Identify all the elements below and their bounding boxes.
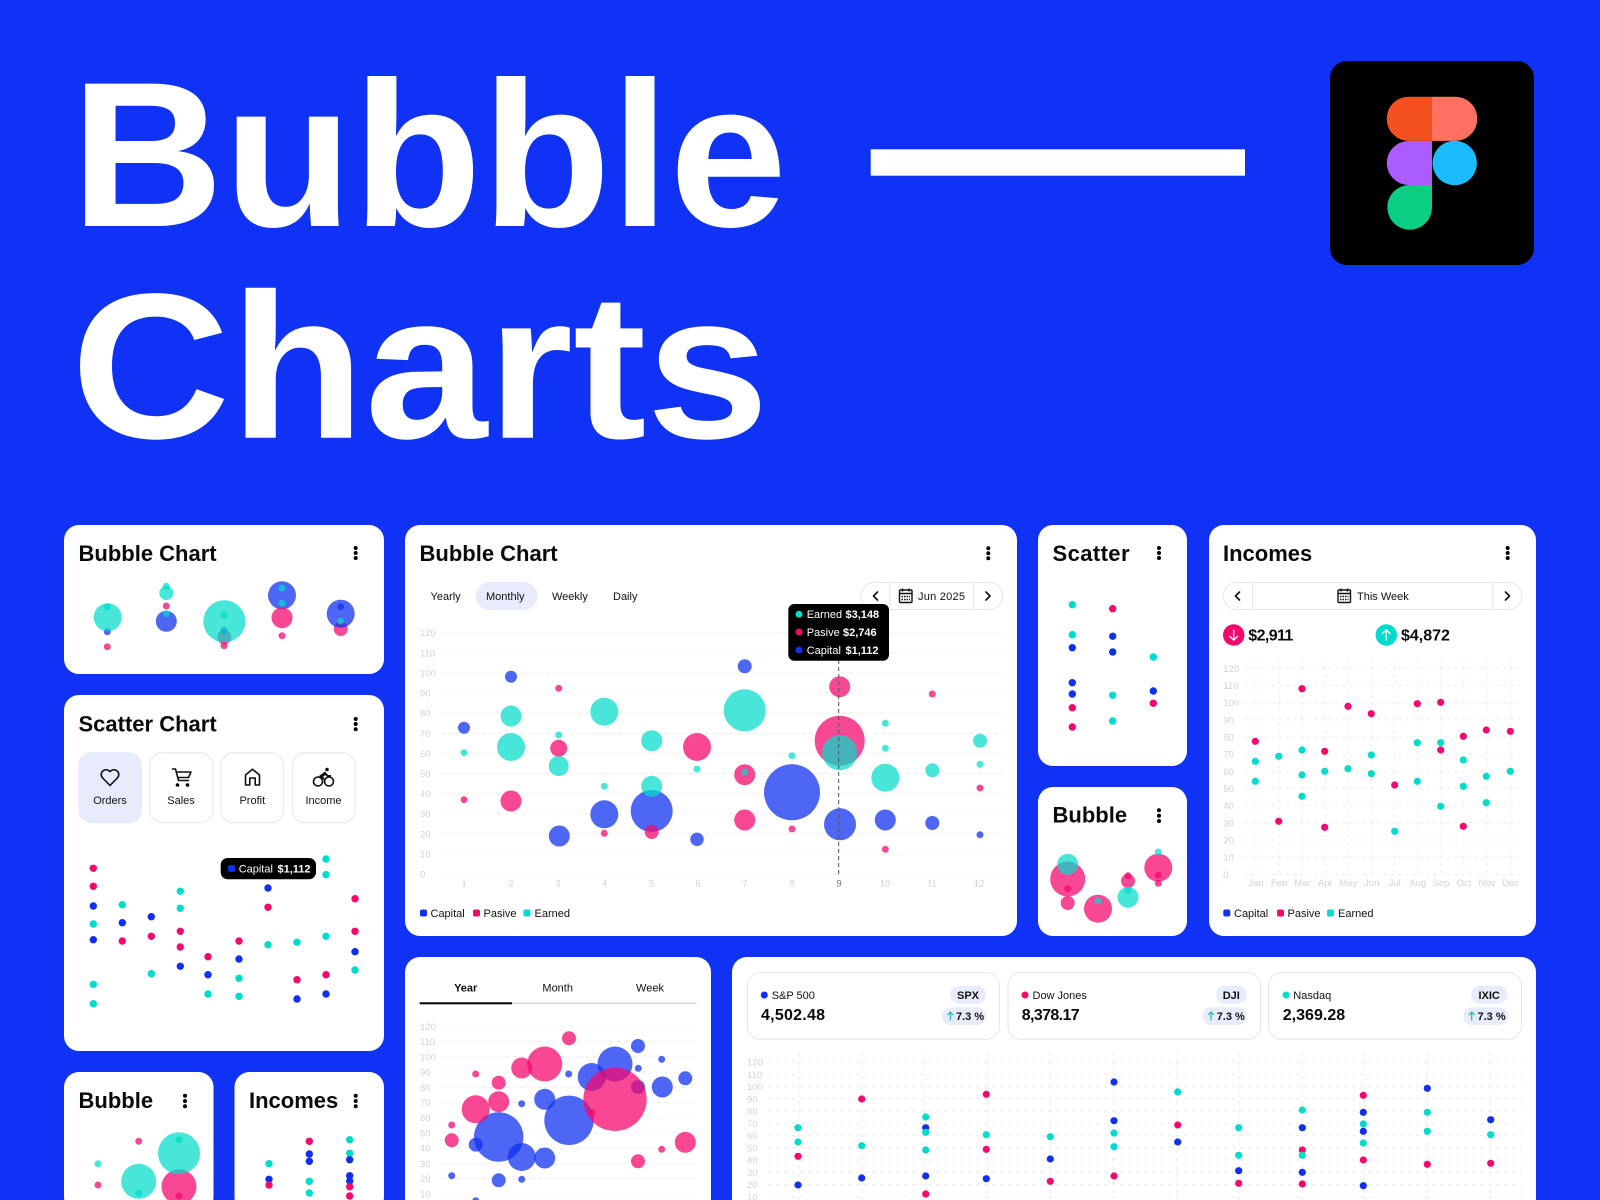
- x axis: 3: [555, 878, 561, 890]
- x axis: 8: [789, 878, 795, 890]
- stat card: Dow Jones: 8,378.17: [1022, 1007, 1080, 1024]
- tab: orders: [78, 752, 142, 823]
- date picker: [861, 582, 1002, 610]
- week picker: This Week: [1357, 591, 1409, 603]
- x axis: [461, 878, 984, 890]
- x axis: 5: [649, 878, 654, 890]
- tooltip: Pasive: [807, 627, 840, 639]
- grid: [441, 1026, 697, 1194]
- y axis: 110: [1223, 681, 1238, 692]
- stat card: S&P 500: 7.3 %: [956, 1011, 984, 1023]
- panel: incomes bottom left: [234, 1072, 384, 1200]
- y axis: 100: [420, 1052, 436, 1063]
- x axis: 2: [508, 878, 514, 890]
- tab: orders: Orders: [93, 795, 127, 807]
- x axis: 10: [880, 878, 890, 890]
- x axis: Aug: [1409, 878, 1426, 889]
- panel: bubble bottom left: [64, 1072, 214, 1200]
- stat: up: $4,872: [1401, 628, 1450, 645]
- y axis: 0: [1223, 870, 1229, 881]
- stat card: Nasdaq: Nasdaq: [1293, 990, 1331, 1002]
- tooltip: capital: [221, 858, 316, 879]
- y axis: 20: [1223, 836, 1234, 846]
- x axis: Oct: [1457, 878, 1472, 889]
- stat card: Nasdaq: [1268, 972, 1522, 1039]
- title: Charts: [71, 251, 769, 482]
- panel: scatter small: [1038, 525, 1187, 766]
- legend: Capital: [430, 908, 465, 920]
- bubbles: [458, 659, 987, 853]
- period tabs: Weekly: [552, 591, 588, 603]
- y axis: [1223, 664, 1239, 881]
- tab: sales: [150, 753, 213, 823]
- tabs: Year: [454, 982, 478, 994]
- tab: profit: Profit: [239, 795, 265, 807]
- y axis: 80: [747, 1106, 758, 1118]
- tab: income: [292, 753, 355, 823]
- y axis: 90: [1223, 715, 1234, 726]
- tabs: [420, 982, 697, 1004]
- y axis: 30: [747, 1168, 758, 1179]
- y axis: 20: [420, 829, 431, 840]
- x axis: 1: [461, 878, 467, 890]
- panel: bubble small: [1038, 787, 1187, 936]
- icon: figma logo: [1330, 61, 1534, 265]
- y axis: 50: [420, 1128, 431, 1140]
- stat card: Nasdaq: 2,369.28: [1283, 1007, 1345, 1024]
- x axis: Jun: [1364, 878, 1379, 889]
- stat: up: [1376, 624, 1450, 646]
- week picker: [1224, 582, 1522, 610]
- y axis: 90: [420, 1068, 431, 1078]
- tab: income: Income: [305, 795, 342, 807]
- tooltip: $2,746: [843, 627, 877, 639]
- x axis: Nov: [1479, 878, 1496, 889]
- stat card: Dow Jones: 7.3 %: [1217, 1011, 1245, 1023]
- x axis: Mar: [1294, 878, 1310, 889]
- y axis: 20: [420, 1174, 431, 1185]
- y axis: 120: [1223, 664, 1239, 675]
- x axis: Apr: [1318, 878, 1333, 889]
- grid: [768, 1053, 1522, 1200]
- panel: bubble chart small: [64, 525, 384, 674]
- panel: scatter chart: [64, 695, 384, 1051]
- y axis: 40: [420, 789, 431, 800]
- y axis: 30: [420, 1159, 431, 1170]
- panel: market indices chart: [732, 957, 1536, 1200]
- y axis: 100: [420, 668, 436, 679]
- panel: main bubble chart: Bubble Chart: [420, 541, 558, 566]
- period tabs: [430, 582, 638, 610]
- tooltip: $1,112: [846, 645, 879, 657]
- stat card: Dow Jones: [1008, 972, 1260, 1039]
- tab: profit: [221, 753, 284, 823]
- grid: [441, 633, 1003, 874]
- y axis: 120: [420, 628, 436, 639]
- tabs: Week: [636, 982, 664, 994]
- tooltip: capital: Capital: [239, 864, 273, 876]
- tooltip: Capital: [807, 645, 841, 657]
- scatter dots: [1252, 685, 1514, 835]
- panel: incomes: [1209, 525, 1536, 936]
- y axis: 60: [747, 1131, 758, 1142]
- y axis: 10: [1223, 853, 1234, 864]
- tooltip: [788, 604, 889, 661]
- x axis: Feb: [1271, 878, 1287, 889]
- panel: bubble chart small: Bubble Chart: [78, 541, 217, 566]
- legend: [420, 908, 570, 920]
- y axis: 20: [747, 1180, 758, 1191]
- y axis: 40: [1223, 801, 1234, 812]
- y axis: 120: [420, 1022, 436, 1033]
- y axis: [420, 628, 436, 880]
- y axis: 70: [420, 1098, 431, 1109]
- x axis: 7: [742, 878, 748, 890]
- stat card: Dow Jones: DJI: [1223, 990, 1240, 1002]
- legend: Earned: [1338, 908, 1373, 920]
- y axis: 80: [1223, 732, 1234, 744]
- x axis: 6: [695, 878, 701, 890]
- legend: Capital: [1234, 908, 1268, 920]
- panel: scatter small: Scatter: [1052, 541, 1130, 566]
- y axis: 110: [747, 1070, 762, 1081]
- y axis: 90: [420, 688, 431, 700]
- tooltip: Earned: [807, 609, 842, 621]
- scatter dots: [90, 855, 359, 1007]
- stat card: S&P 500: S&P 500: [772, 990, 815, 1002]
- x axis: 4: [602, 878, 607, 890]
- period tabs: Daily: [613, 591, 638, 603]
- y axis: 80: [420, 1083, 431, 1094]
- y axis: 110: [420, 648, 435, 659]
- stat card: Dow Jones: Dow Jones: [1032, 990, 1087, 1002]
- panel: main bubble chart: [405, 525, 1017, 936]
- legend: Pasive: [484, 908, 517, 920]
- panel: scatter chart: Scatter Chart: [78, 712, 217, 737]
- y axis: 40: [420, 1144, 431, 1155]
- y axis: 60: [420, 1113, 431, 1124]
- x axis: Jan: [1248, 878, 1264, 889]
- x axis: Dec: [1502, 878, 1519, 889]
- panel: bubble bottom left: Bubble: [78, 1088, 153, 1113]
- bubbles: [445, 1031, 696, 1200]
- y axis: 120: [747, 1058, 763, 1068]
- tooltip: capital: $1,112: [278, 864, 311, 876]
- stat card: Nasdaq: IXIC: [1478, 990, 1500, 1002]
- y axis: 70: [747, 1119, 758, 1130]
- legend: Earned: [534, 908, 570, 920]
- y axis: [747, 1058, 763, 1200]
- legend: [1223, 908, 1373, 920]
- scatter dots: [794, 1078, 1494, 1198]
- x axis: 9: [836, 878, 842, 890]
- y axis: 30: [420, 809, 431, 820]
- x axis: 11: [927, 878, 937, 890]
- y axis: 100: [1223, 698, 1239, 709]
- x axis: 12: [974, 878, 984, 890]
- stat: down: [1223, 624, 1293, 646]
- stat card: Nasdaq: 7.3 %: [1478, 1011, 1506, 1023]
- y axis: 80: [420, 709, 431, 720]
- panel: incomes bottom left: Incomes: [249, 1088, 338, 1113]
- stat card: S&P 500: [748, 972, 1000, 1039]
- y axis: 50: [747, 1143, 758, 1154]
- tab: sales: Sales: [167, 795, 195, 807]
- title: [71, 39, 1245, 482]
- tooltip: $3,148: [846, 609, 879, 621]
- y axis: 60: [1223, 767, 1234, 778]
- period tabs: Monthly: [486, 591, 525, 603]
- panel: incomes: Incomes: [1223, 541, 1312, 566]
- y axis: 100: [747, 1082, 763, 1093]
- stat: down: $2,911: [1248, 628, 1293, 645]
- panel: bubble small: Bubble: [1052, 803, 1127, 828]
- y axis: 110: [420, 1037, 435, 1048]
- y axis: 0: [420, 870, 425, 880]
- y axis: 60: [420, 749, 431, 760]
- legend: Pasive: [1288, 908, 1321, 920]
- date picker: Jun 2025: [918, 591, 965, 603]
- y axis: 10: [420, 850, 431, 860]
- stat card: S&P 500: SPX: [957, 990, 980, 1002]
- y axis: 50: [420, 769, 431, 780]
- panel: year bubble chart: [405, 957, 711, 1200]
- grid: [1244, 660, 1522, 874]
- period tabs: Yearly: [430, 591, 461, 603]
- stat card: S&P 500: 4,502.48: [761, 1007, 825, 1024]
- x axis: Jul: [1389, 878, 1401, 889]
- y axis: 30: [1223, 818, 1234, 829]
- tabs: Month: [542, 982, 573, 994]
- title: Bubble: [71, 39, 787, 270]
- y axis: 50: [1223, 784, 1234, 795]
- y axis: 70: [1223, 750, 1234, 761]
- x axis: [1248, 878, 1519, 889]
- x axis: Sep: [1433, 878, 1449, 889]
- x axis: May: [1339, 878, 1358, 889]
- y axis: 70: [420, 729, 431, 740]
- y axis: [420, 1022, 436, 1200]
- y axis: 40: [747, 1156, 758, 1166]
- y axis: 90: [747, 1094, 758, 1105]
